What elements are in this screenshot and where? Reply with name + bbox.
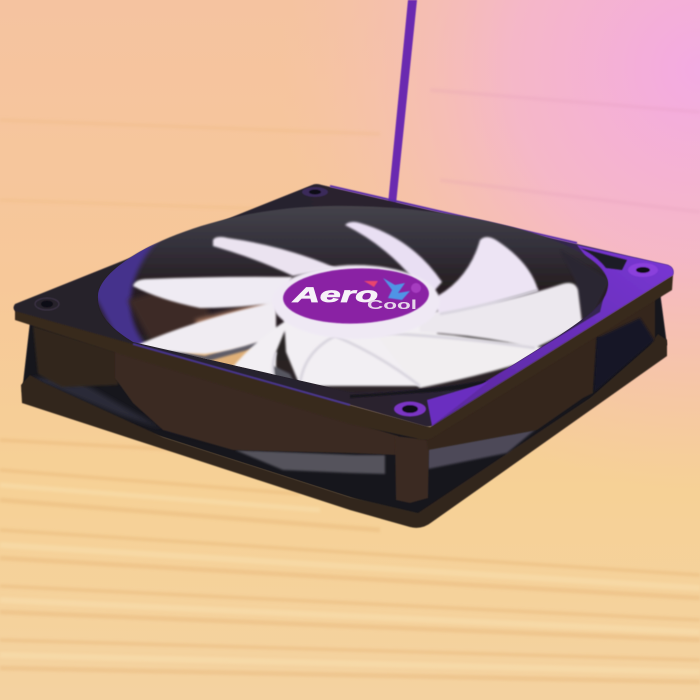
hub <box>272 265 440 339</box>
blade bottom <box>232 321 286 376</box>
screw hole: left <box>35 298 59 310</box>
frame front edge <box>15 275 673 440</box>
left purple duct wall <box>98 242 159 345</box>
fan blades <box>133 222 582 388</box>
fan blade seen through left side <box>235 450 385 474</box>
screw hole: right <box>628 263 658 277</box>
front-left purple line <box>133 344 350 405</box>
blade left <box>133 277 292 308</box>
dark interior between frame plates <box>22 292 667 520</box>
fan blade seen through right side <box>428 429 536 469</box>
blade seam shading <box>273 290 538 386</box>
front slot in frame <box>350 380 488 398</box>
blade top <box>345 222 442 298</box>
table seen through fan <box>184 346 252 368</box>
dark recess right corner <box>580 248 627 270</box>
dark blade under lower-left <box>180 341 258 360</box>
logo text: Cool: Cool <box>367 297 417 312</box>
frame top face <box>14 184 673 427</box>
purple power cable <box>388 0 417 204</box>
purple frame lit area <box>430 245 673 427</box>
back edge highlight <box>330 186 577 243</box>
centre left wall <box>115 350 398 455</box>
blade bottom right <box>418 332 542 389</box>
blade lower left <box>137 302 276 354</box>
front corner post <box>395 436 429 503</box>
shadow under lower blade <box>272 365 294 379</box>
inside of opening <box>94 222 610 390</box>
blade top left <box>213 237 336 276</box>
logo bird <box>364 278 421 300</box>
hub underside fill <box>284 315 440 386</box>
right dark duct wall <box>564 254 608 318</box>
left corner post <box>33 326 118 387</box>
fan opening <box>98 206 608 392</box>
bottom plate <box>21 334 667 528</box>
right window dark <box>594 318 654 392</box>
hub collar <box>272 265 440 339</box>
blade upper right <box>430 237 538 314</box>
blade right <box>418 283 582 348</box>
fan <box>14 184 673 528</box>
logo text: Aero: Aero <box>291 284 378 307</box>
screw hole: back <box>302 187 328 197</box>
screw hole: front <box>394 402 426 416</box>
purple near front corner <box>427 382 488 426</box>
right wall <box>426 296 655 450</box>
hub purple label <box>282 266 430 326</box>
brown duct wall <box>126 294 210 339</box>
